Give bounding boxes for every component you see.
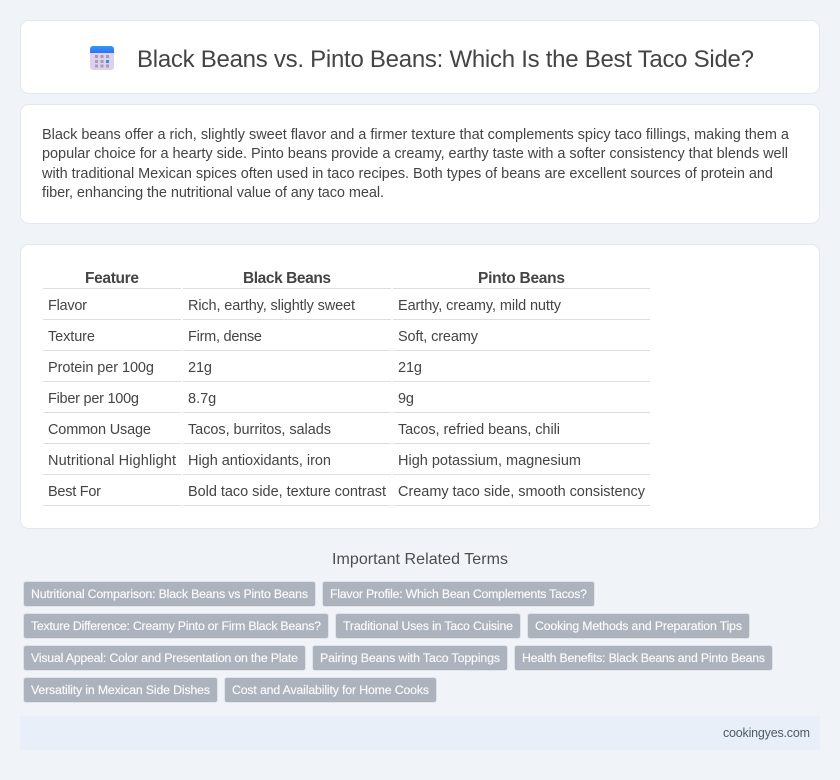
row: best for (48, 484, 646, 500)
row: best for: Creamy taco side, smooth consistency (398, 484, 646, 500)
panel: comparison table (20, 244, 820, 528)
table header row: Feature (85, 270, 139, 287)
row: texture: Texture (48, 329, 95, 345)
row: flavor: Rich, earthy, slightly sweet (188, 298, 355, 314)
row: best for: Bold taco side, texture contrast (188, 484, 386, 500)
table header row: Pinto Beans (478, 270, 565, 287)
table header row (85, 270, 565, 287)
tag list: related terms: Cooking Methods and Preparation Tips (535, 619, 742, 633)
row: nutritional highlight: High antioxidants, iron (188, 453, 331, 469)
row: protein: 21g (188, 360, 212, 376)
tag list: related terms (24, 582, 772, 702)
row: fiber: 9g (398, 391, 414, 407)
tag list: related terms: Flavor Profile: Which Bean Complements Tacos? (330, 587, 587, 601)
row: fiber: Fiber per 100g (48, 391, 139, 407)
row: flavor: Flavor (48, 298, 87, 314)
heading: related terms: Important Related Terms (332, 551, 508, 568)
row: fiber: 8.7g (188, 391, 216, 407)
tag list: related terms: Versatility in Mexican Side Dishes (31, 683, 210, 697)
tag list: related terms: Texture Difference: Creamy Pinto or Firm Black Beans? (31, 619, 321, 633)
icon: calendar (90, 46, 114, 70)
tag list: related terms: Health Benefits: Black Beans and Pinto Beans (522, 651, 765, 665)
row: texture (48, 329, 479, 345)
row: protein (48, 360, 422, 376)
row: nutritional highlight: Nutritional Highlight (48, 453, 176, 469)
row: fiber (48, 391, 414, 407)
row: nutritional highlight (48, 453, 581, 469)
tag list: related terms: Nutritional Comparison: Black Beans vs Pinto Beans (31, 587, 308, 601)
row: texture: Firm, dense (188, 329, 262, 345)
tag list: related terms: Pairing Beans with Taco Toppings (320, 651, 500, 665)
row: nutritional highlight: High potassium, magnesium (398, 453, 581, 469)
text block: description: Black beans offer a rich, slightly sweet flavor and a firmer texture that complements spicy taco fillings, making them a (42, 127, 790, 143)
tag list: related terms: Cost and Availability for Home Cooks (232, 683, 429, 697)
row: flavor: Earthy, creamy, mild nutty (398, 298, 562, 314)
footer (20, 716, 820, 750)
row: protein: Protein per 100g (48, 360, 154, 376)
footer: cookingyes.com (723, 726, 810, 740)
title: Black Beans vs. Pinto Beans: Which Is the Best Taco Side? (137, 46, 754, 73)
text block: description (41, 127, 790, 201)
row: common usage: Tacos, burritos, salads (188, 422, 331, 438)
row: texture: Soft, creamy (398, 329, 479, 345)
panel: title header (20, 20, 820, 94)
text block: description: popular choice for a hearty side. Pinto beans provide a creamy, earthy taste with a softer consistency that blends well (42, 146, 788, 162)
row: common usage: Tacos, refried beans, chili (398, 422, 560, 438)
row: common usage (48, 422, 560, 438)
row: best for: Best For (48, 484, 101, 500)
text block: description: with traditional Mexican spices often used in taco recipes. Both types of beans are excellent sources of protein and (41, 166, 773, 182)
row: protein: 21g (398, 360, 422, 376)
table header row: Black Beans (243, 270, 331, 287)
tag list: related terms: Traditional Uses in Taco Cuisine (343, 619, 513, 633)
row: flavor (48, 298, 562, 314)
row: common usage: Common Usage (48, 422, 151, 438)
tag list: related terms: Visual Appeal: Color and Presentation on the Plate (31, 651, 298, 665)
text block: description: fiber, enhancing the nutritional value of any taco meal. (42, 185, 384, 201)
panel: description (20, 104, 820, 224)
